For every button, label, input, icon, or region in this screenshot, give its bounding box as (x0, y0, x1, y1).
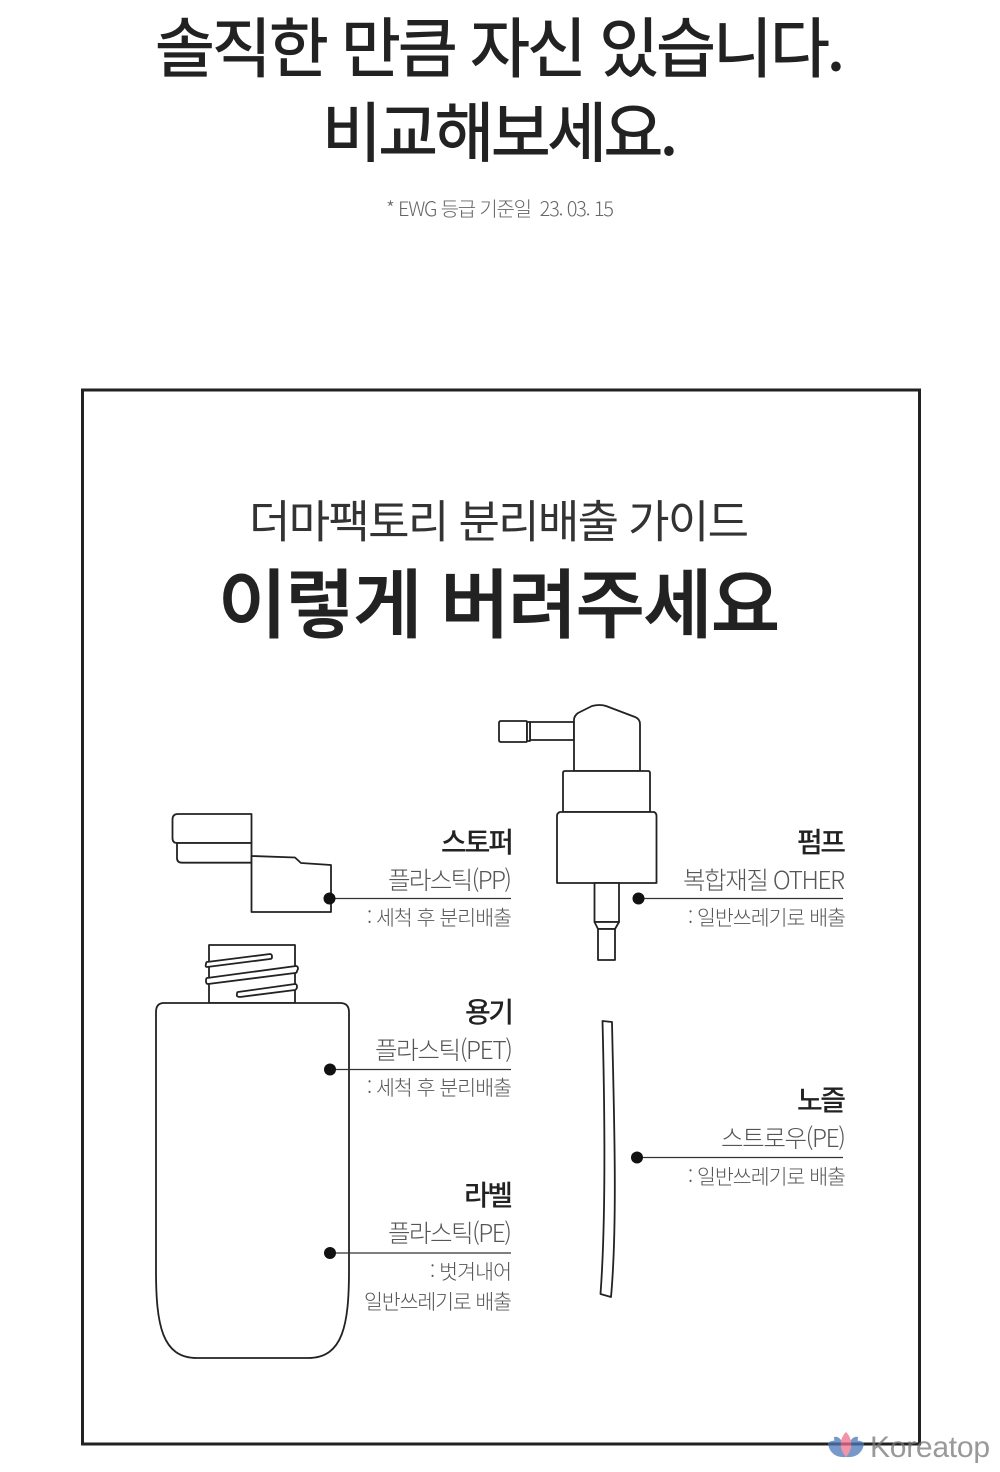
heading: comparison title (155, 0, 845, 175)
label: sticker: 일반쓰레기로 배출 (364, 1285, 512, 1315)
label: container (324, 991, 514, 1101)
panel: recycling guide frame (82, 390, 920, 1444)
label: container: : 세척 후 분리배출 (367, 1071, 512, 1101)
icon: stopper (172, 814, 331, 912)
label: stopper (324, 821, 514, 931)
label: nozzle: 스트로우(PE) (721, 1120, 846, 1155)
label: pump (632, 821, 846, 931)
label: nozzle: 노즐 (797, 1079, 846, 1119)
label: nozzle: : 일반쓰레기로 배출 (688, 1160, 846, 1190)
label: sticker: : 벗겨내어 (430, 1255, 512, 1285)
icon: pump (499, 705, 656, 960)
label: pump: 펌프 (797, 821, 846, 861)
icon: bottle (156, 945, 349, 1358)
label: nozzle (631, 1079, 846, 1190)
label: stopper: : 세척 후 분리배출 (367, 901, 512, 931)
label: sticker: 라벨 (464, 1174, 513, 1214)
label: sticker: 플라스틱(PE) (388, 1215, 512, 1250)
label: sticker (324, 1174, 513, 1315)
label: stopper: 스토퍼 (441, 821, 514, 861)
label: stopper: 플라스틱(PP) (388, 862, 512, 897)
label: pump: : 일반쓰레기로 배출 (688, 901, 846, 931)
icon: straw nozzle (600, 1021, 615, 1297)
label: pump: 복합재질 OTHER (683, 862, 845, 897)
label: container: 용기 (465, 991, 514, 1031)
label: container: 플라스틱(PET) (375, 1032, 513, 1067)
heading: comparison title: 비교해보세요. (322, 81, 678, 175)
heading: guide title: 이렇게 버려주세요 (218, 544, 780, 654)
footnote: EWG date: * EWG 등급 기준일 23. 03. 15 (386, 193, 614, 222)
heading: guide subtitle: 더마팩토리 분리배출 가이드 (249, 486, 749, 550)
watermark: Koreatop logo: Koreatop (870, 1431, 990, 1464)
